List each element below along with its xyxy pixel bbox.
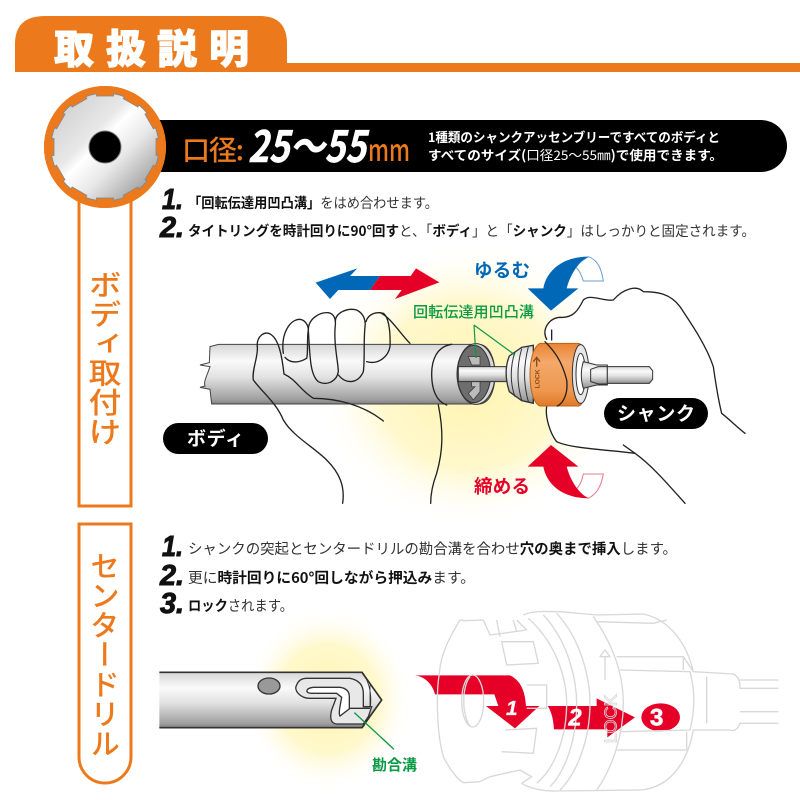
- leader lines: groove: [474, 325, 515, 358]
- red badge 3: [641, 703, 680, 731]
- banner note: すべてのサイズ( 口径25～55㎜ )で使用できます。: [428, 145, 723, 164]
- steps: body attachment: 2.: [159, 212, 184, 244]
- side label: ボディ取付け: [81, 270, 129, 446]
- numeral 3: 3: [650, 705, 663, 732]
- red arrow 1: [415, 675, 539, 728]
- diameter range: 25～55: [248, 113, 370, 175]
- LOCK mark: LOCK: [601, 694, 621, 743]
- label: tighten: 締める: [474, 473, 530, 499]
- side label: センタードリル: [84, 551, 126, 758]
- steps: center drill: ロックされます。: [188, 595, 293, 616]
- steps: center drill: 3.: [160, 588, 184, 620]
- yellow glow: [244, 609, 412, 789]
- black size banner: [150, 113, 787, 175]
- double arrow: slide: [316, 268, 439, 299]
- steps: body attachment: 1.: [162, 184, 183, 216]
- right hand: [545, 288, 745, 503]
- curved arrow: loosen: [528, 257, 603, 311]
- diameter label: 口径:: [182, 129, 244, 169]
- label: groove: 回転伝達用凹凸溝: [413, 301, 534, 322]
- left hand: [253, 309, 442, 503]
- drill bit: [159, 672, 382, 728]
- shank line drawing: [437, 611, 778, 791]
- label: groove: 勘合溝: [372, 754, 417, 775]
- pill: body: [163, 423, 268, 454]
- core body cylinder: [200, 344, 495, 405]
- steps: body attachment: [159, 184, 755, 244]
- banner note: 1種類のシャンクアッセンブリーですべてのボディと: [428, 127, 720, 146]
- side box: body attachment: [79, 190, 131, 506]
- steps: center drill: 1.: [162, 531, 183, 563]
- steps: center drill: シャンクの突起とセンタードリルの勘合溝を合わせ穴の奥まで挿入します。: [188, 538, 677, 559]
- shank assembly: [458, 342, 653, 406]
- steps: center drill: 2.: [159, 560, 184, 592]
- yellow glow: [320, 245, 620, 525]
- side box: center drill: [79, 524, 131, 783]
- illustration: body and shank: [163, 245, 745, 525]
- pill: shank: シャンク: [617, 399, 695, 426]
- illustration: center drill: [159, 609, 417, 789]
- numeral 2: 2: [567, 704, 582, 731]
- numeral 1: 1: [506, 697, 517, 720]
- gear icon: [44, 86, 166, 208]
- banner note: [428, 127, 723, 164]
- steps: center drill: 更に時計回りに60°回しながら押込みます。: [188, 567, 475, 588]
- unit: mm: [368, 126, 410, 170]
- pill: shank: [604, 398, 708, 429]
- illustration: lock sequence: [415, 611, 778, 791]
- pill: body: ボディ: [187, 424, 244, 451]
- steps: body attachment: タイトリングを時計回りに90°回すと、「ボディ」と「シャンク」はしっかりと固定されます。: [188, 221, 755, 241]
- red arrow 2: [548, 698, 635, 737]
- label: loosen: ゆるむ: [474, 257, 530, 283]
- title: 取扱説明: [54, 17, 249, 75]
- steps: center drill: [159, 531, 677, 620]
- title tab: [15, 16, 800, 75]
- steps: body attachment: 「回転伝達用凹凸溝」をはめ合わせます。: [188, 193, 438, 213]
- curved arrow: tighten: [528, 445, 603, 498]
- shank assembly: LOCK: [534, 369, 541, 388]
- leader line: groove: [354, 713, 394, 749]
